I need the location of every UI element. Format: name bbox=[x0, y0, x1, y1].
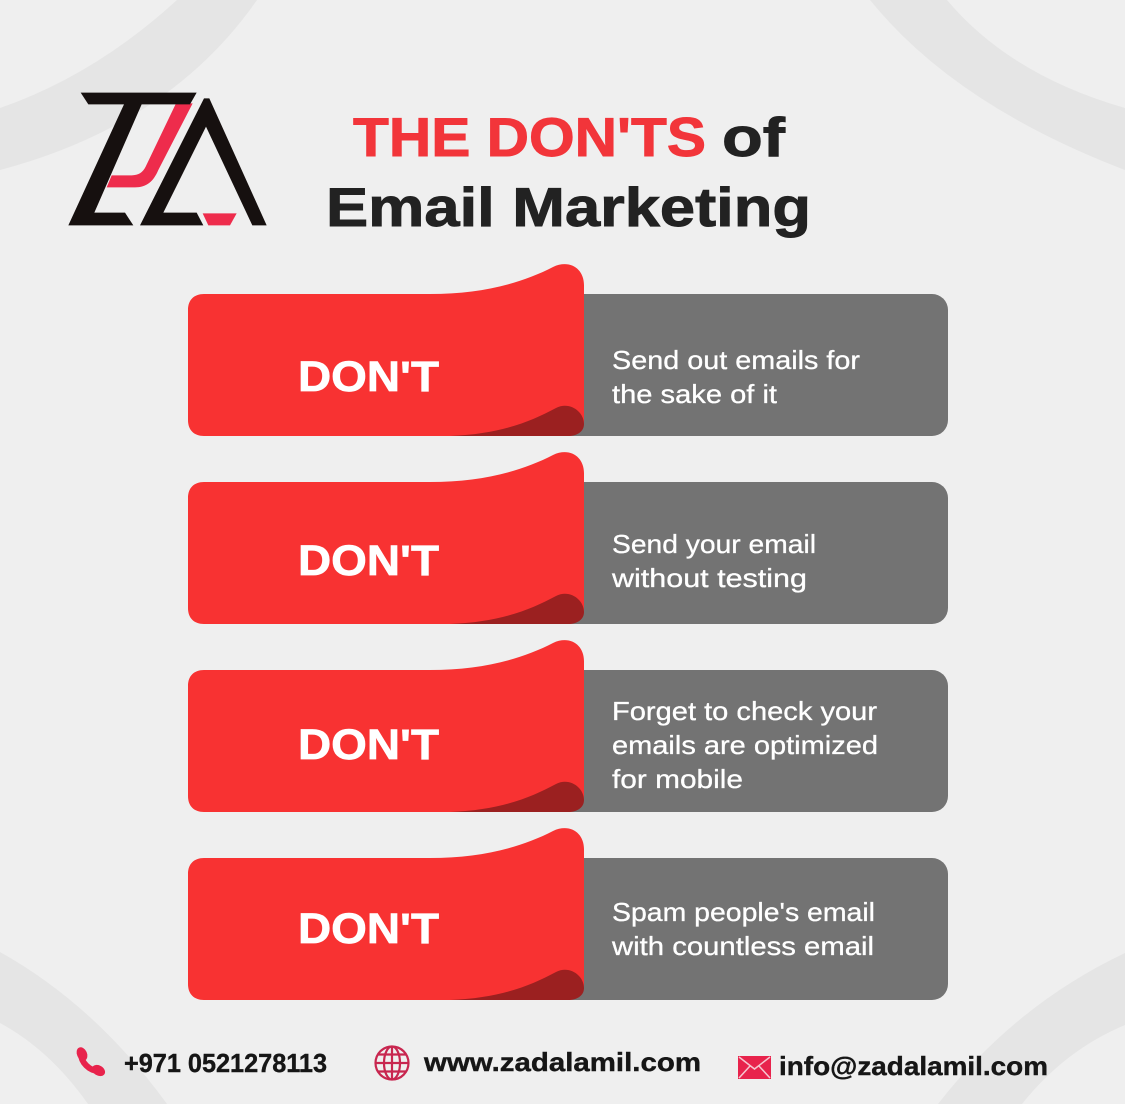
don't label 2: DON'T bbox=[298, 537, 439, 585]
row 1 text: the sake of it bbox=[612, 379, 778, 409]
grey panel 4 bbox=[540, 858, 948, 1000]
don't label 3: DON'T bbox=[298, 721, 439, 769]
row 1 text bbox=[612, 345, 860, 409]
logo red foot bbox=[203, 213, 237, 225]
grey panel 3 bbox=[540, 670, 948, 812]
red ribbon 1 bbox=[188, 264, 584, 436]
row 2 text: without testing bbox=[611, 563, 807, 593]
red ribbon 2 bbox=[188, 452, 584, 624]
logo letter A bbox=[140, 98, 267, 225]
icon: phone bbox=[75, 1046, 107, 1078]
logo letter Z bbox=[68, 93, 197, 225]
row 2 bbox=[188, 452, 948, 624]
grey panel 2 bbox=[540, 482, 948, 624]
row 2 text bbox=[611, 529, 816, 593]
row 4 text bbox=[611, 897, 875, 961]
icon: globe bbox=[376, 1046, 408, 1080]
email: info@zadalamil.com bbox=[779, 1051, 1048, 1081]
don't label 4: DON'T bbox=[298, 905, 439, 953]
row 4 text: Spam people's email bbox=[612, 897, 875, 927]
red ribbon 4 bbox=[188, 828, 584, 1000]
grey panel 1 bbox=[540, 294, 948, 436]
logo bbox=[68, 93, 267, 225]
row 2 text: Send your email bbox=[612, 529, 816, 559]
footer contacts bbox=[75, 1046, 1048, 1081]
phone number: +971 0521278113 bbox=[124, 1048, 327, 1078]
row 4 bbox=[188, 828, 948, 1000]
red ribbon 3 bbox=[188, 640, 584, 812]
row 3 text: Forget to check your bbox=[612, 696, 877, 726]
title bbox=[326, 106, 811, 238]
row 1 text: Send out emails for bbox=[612, 345, 860, 375]
row 1 bbox=[188, 264, 948, 436]
title word of: of bbox=[722, 106, 786, 168]
website: www.zadalamil.com bbox=[423, 1047, 701, 1077]
row 3 bbox=[188, 640, 948, 812]
title red part: THE DON'TS bbox=[353, 106, 706, 168]
row 3 text: for mobile bbox=[612, 764, 743, 794]
icon: envelope bbox=[738, 1056, 771, 1079]
logo red J stroke bbox=[107, 103, 193, 187]
row 3 text: emails are optimized bbox=[612, 730, 878, 760]
row 3 text bbox=[612, 696, 878, 794]
row 4 text: with countless email bbox=[611, 931, 874, 961]
don't label 1: DON'T bbox=[298, 353, 439, 401]
title second line: Email Marketing bbox=[326, 176, 811, 238]
